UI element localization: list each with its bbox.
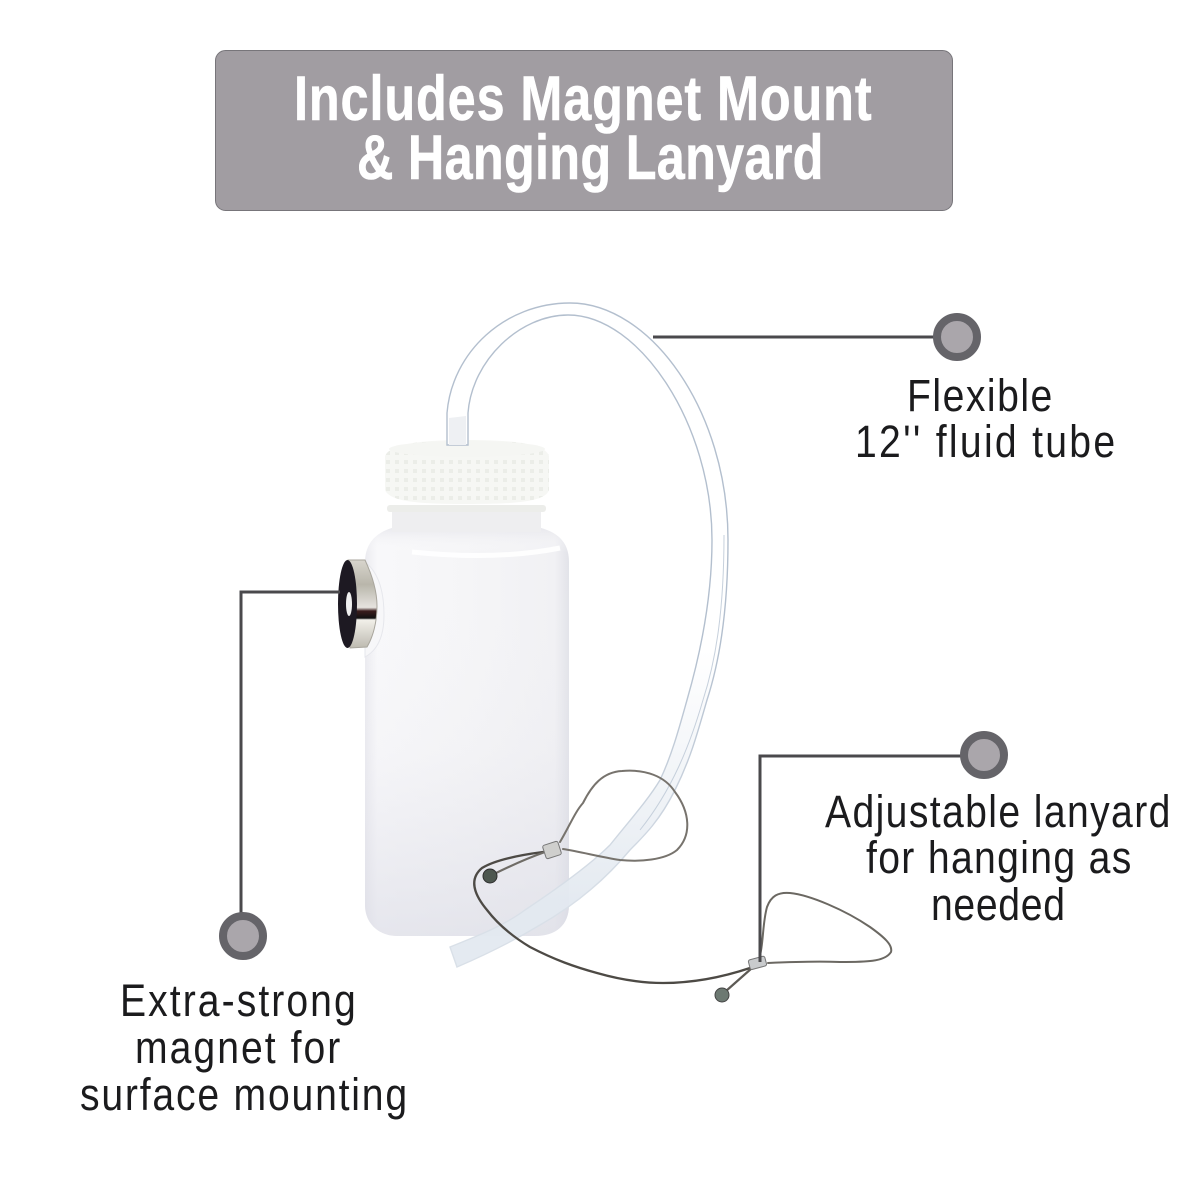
magnet side bulge [365,562,384,657]
long wire [474,852,750,983]
banner [216,50,952,210]
chrome ring [348,560,377,648]
short end [492,852,545,875]
bottle cap [385,440,549,504]
magnet label: surface mounting [80,1069,407,1120]
right end ball [715,988,729,1002]
bottle shoulder highlight [412,548,560,555]
left end ball [483,869,497,883]
tube label [855,370,1115,467]
left loop [560,771,687,861]
banner title: Includes Magnet Mount [294,64,872,134]
right loop [758,893,891,963]
callout: magnet [80,592,407,1120]
bottle body [365,528,569,936]
lanyard label: for hanging as [866,832,1131,883]
tube label: Flexible [907,370,1052,421]
banner title: & Hanging Lanyard [357,123,823,193]
lanyard label: needed [931,879,1065,930]
callout: tube [653,317,1115,467]
lanyard label [825,786,1170,930]
right crimp [748,956,767,970]
magnet [338,560,377,648]
magnet label: Extra-strong [120,975,356,1026]
fluid tube [447,303,728,967]
bottle neck [392,510,541,532]
lanyard label: Adjustable lanyard [825,786,1170,837]
magnet label [80,975,407,1120]
bottle [365,440,569,936]
callout: lanyard [760,735,1170,962]
center hole [346,592,352,616]
magnet label: magnet for [135,1022,340,1073]
black disk [338,560,357,648]
lanyard [474,771,891,1002]
tube label: 12'' fluid tube [855,416,1115,467]
banner title [294,64,872,193]
left crimp [542,841,562,859]
